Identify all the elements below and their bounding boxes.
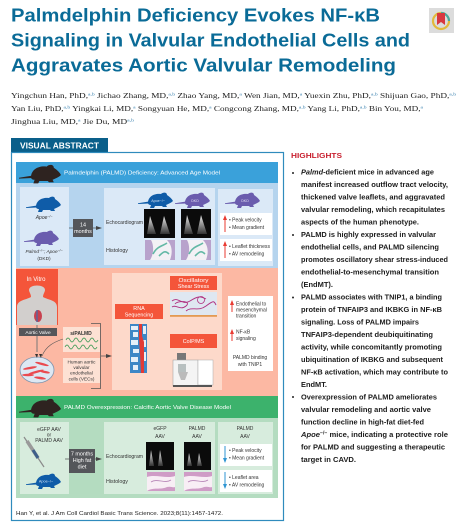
outcomes white box: transition (236, 314, 257, 320)
panel: advanced age model (16, 162, 278, 268)
mouse groups box: −/− (58, 248, 63, 252)
authors: Jie Du, MD (81, 117, 128, 126)
outcomes white box: mesenchymal (236, 308, 267, 314)
highlights list (292, 168, 448, 464)
aortic valve label: Aortic Valve (25, 330, 51, 336)
highlight 3 (292, 293, 448, 389)
siPALMD box (63, 327, 100, 352)
authors: Congcong Zhang, MD, (212, 104, 299, 113)
authors: a (421, 104, 423, 110)
mouse groups box: Apoe (36, 215, 47, 221)
visual abstract frame (12, 152, 284, 520)
oscillatory shear stress (170, 276, 217, 290)
panel header: overexpression: PALMD Overexpression: Calcific Aortic Valve Disease Model (64, 405, 231, 411)
injection box: eGFP AAV (37, 427, 62, 433)
highlight 1: Palmd-deficient mice in advanced age (301, 168, 434, 177)
imaging results box (104, 188, 215, 265)
authors: a (78, 118, 81, 122)
imaging results box: Histology (106, 479, 129, 485)
highlight 2: endothelial-to-mesenchymal transition (301, 268, 439, 277)
highlight 3: NF-κB activation, which may contribute to (301, 368, 448, 376)
highlight 1: thickened valve leaflets, and aggravated (301, 193, 445, 202)
authors (11, 91, 457, 126)
panel header: deficiency (16, 162, 278, 183)
visual abstract tab: VISUAL ABSTRACT (20, 142, 99, 150)
PALMD AAV outcomes box: • Peak velocity (229, 448, 262, 454)
authors: a (239, 92, 242, 96)
injection box: or (47, 432, 52, 438)
injection box: PALMD AAV (35, 438, 63, 444)
authors: a,b (360, 104, 367, 110)
culture dish (20, 325, 63, 383)
in vitro human figure: In Vitro (27, 277, 46, 283)
imaging results box: Apoe−/− (151, 199, 165, 203)
outcomes white box (228, 296, 273, 371)
authors: a,b (168, 92, 176, 98)
highlight 4: −/− (320, 430, 327, 436)
authors: Yingchun Han, PhD, (11, 91, 74, 100)
mass spectrometer (173, 353, 213, 387)
outcomes white box: Endothelial to (236, 302, 267, 308)
DKD outcomes box: DKD (241, 199, 249, 203)
human VECs label: Human aortic (68, 360, 96, 364)
oscillatory shear stress: Oscillatory (178, 278, 209, 284)
arrow and 7 months: High fat (73, 458, 92, 464)
authors: a,b (88, 92, 96, 98)
mouse groups box: −/− (39, 248, 44, 252)
PALMD AAV outcomes box: AAV (240, 434, 250, 440)
oscillatory shear stress: Shear Stress (178, 284, 209, 290)
arrow and 7 months (65, 449, 102, 473)
authors: Yuexin Zhu, PhD, (302, 91, 371, 100)
imaging results box (104, 422, 215, 494)
arrow and 7 months: diet (78, 464, 87, 470)
DKD outcomes box: • AV remodeling (229, 252, 265, 258)
panel: overexpression model (16, 396, 278, 498)
CoIP/MS: CoIP/MS (183, 339, 205, 345)
human VECs label (63, 358, 100, 383)
authors: Yang Li, PhD, (305, 104, 360, 113)
authors: a,b (371, 92, 379, 98)
title: Aggravates Aortic Valvular Remodeling (11, 54, 396, 76)
highlight 4: Apoe (300, 430, 320, 439)
highlight 2: (EndMT). (301, 280, 333, 289)
highlight 4: target in CAVD. (301, 455, 356, 464)
outcomes white box: PALMD binding (233, 355, 267, 361)
highlight 2: PALMD is highly expressed in valvular (301, 230, 436, 239)
highlight 1: valvular remodeling, which recapitulates (301, 205, 445, 214)
highlight 4: valvular remodeling and aortic valve (301, 405, 431, 414)
title: Signaling in Valvular Endothelial Cells and (11, 30, 410, 50)
highlights heading: HIGHLIGHTS (291, 151, 342, 160)
imaging results box: PALMD (189, 426, 206, 432)
authors: Zhao Yang, MD, (175, 91, 239, 100)
imaging results box: Echocardiogram (106, 454, 143, 460)
authors: Songyuan He, MD, (136, 104, 209, 113)
authors: Wen Jian, MD, (242, 91, 300, 100)
PALMD AAV outcomes box (218, 422, 273, 494)
highlight 3: PALMD associates with TNIP1, a binding (301, 293, 442, 302)
outcomes white box: signaling (236, 336, 256, 342)
arrow and 14 months (69, 219, 102, 237)
bracket arrow (91, 324, 112, 388)
arrow and 14 months: 14 (80, 222, 86, 228)
authors: a (209, 104, 212, 110)
highlight 1 (292, 168, 448, 227)
authors: Yan Liu, PhD, (11, 104, 55, 113)
panel header: deficiency: Palmdelphin (PALMD) Deficiency: Advanced Age Model (64, 170, 220, 176)
authors: a,b (64, 104, 71, 110)
icon: crossmark badge (429, 8, 454, 33)
PALMD AAV outcomes box: • Leaflet area (229, 475, 259, 481)
arrow and 14 months: months (74, 229, 92, 235)
authors: a,b (299, 104, 306, 110)
human VECs label: endothelial (70, 370, 93, 376)
highlight 2 (292, 230, 448, 289)
imaging results box: DKD (191, 199, 199, 203)
in vitro human figure (16, 269, 58, 325)
DKD outcomes box: • Peak velocity (229, 218, 262, 224)
title: Palmdelphin Deficiency Evokes NF-κB (11, 4, 380, 26)
imaging results box: Echocardiogram (106, 220, 143, 226)
highlight 4: function decline in high-fat diet-fed (301, 418, 424, 426)
title (11, 4, 410, 76)
authors: Shijuan Gao, PhD, (378, 91, 449, 100)
siPALMD box: siPALMD (70, 331, 92, 337)
imaging results box: AAV (155, 434, 165, 440)
authors: a (300, 92, 302, 96)
PALMD AAV outcomes box: • AV remodeling (229, 482, 265, 488)
arrow and 7 months: 7 months (71, 452, 93, 458)
authors: a,b (127, 118, 135, 124)
flow diagram (170, 292, 217, 317)
human VECs label: cells (VECs) (69, 376, 95, 382)
aortic valve label (19, 328, 57, 336)
outcomes white box: with TNIP1 (238, 362, 262, 368)
DKD outcomes box: • Leaflet thickness (229, 244, 271, 250)
human VECs label: valvular (73, 365, 90, 370)
mouse groups box: Palmd (25, 250, 39, 255)
highlight 3: protein of TNFAIP3 and IKBKG in NF-κB (301, 305, 443, 314)
imaging results box: Histology (106, 248, 129, 254)
DKD outcomes box: • Mean gradient (229, 225, 265, 231)
authors: Jichao Zhang, MD, (95, 91, 169, 100)
highlight 4: mice, indicating a protective role (327, 430, 448, 439)
authors: Yingkai Li, MD, (70, 104, 133, 113)
highlight 3: activity, while concomitantly promoting (301, 342, 442, 352)
RNA sequencing (115, 304, 163, 319)
highlight 3: TNFAIP3-dependent deubiquitinating (301, 330, 433, 339)
outcomes white box: NF-κB (236, 330, 251, 336)
DKD outcomes box (218, 189, 273, 266)
authors: Bin You, MD, (367, 104, 421, 113)
visual abstract tab (11, 138, 108, 153)
highlight 3: signaling. Loss of PALMD impairs (301, 318, 419, 327)
mouse groups box: −/− (47, 214, 52, 218)
highlight 2: promotes oscillatory shear stress-induced (301, 255, 448, 264)
methods box (112, 273, 222, 390)
heatmap (130, 324, 147, 373)
highlight 3: EndMT. (301, 380, 327, 389)
panel header: overexpression (16, 396, 278, 418)
highlight 4 (292, 392, 448, 464)
imaging results box: eGFP (153, 426, 167, 432)
panel: in vitro (16, 268, 278, 396)
highlight 1: aspects of the human phenotype. (301, 218, 419, 227)
PALMD AAV outcomes box: • Mean gradient (229, 456, 265, 462)
authors: a,b (449, 92, 457, 98)
authors: a (133, 104, 136, 110)
citation: Han Y, et al. J Am Coll Cardiol Basic Trans Science. 2023;8(11):1457-1472. (16, 511, 223, 517)
mouse groups box (20, 187, 69, 266)
RNA sequencing: Sequencing (125, 312, 153, 318)
mouse groups box: (DKD) (37, 256, 51, 262)
highlight 1: manifest increased outflow tract velocity, (301, 180, 448, 189)
RNA sequencing: RNA (133, 306, 145, 312)
imaging results box: AAV (192, 434, 202, 440)
mouse groups box: ; Apoe (44, 249, 58, 255)
highlight 3: ubiquitination of IKBKG and subsequent (301, 355, 443, 364)
highlight 4: for PALMD and suggesting a therapeutic (301, 442, 445, 452)
PALMD AAV outcomes box: PALMD (237, 426, 254, 432)
highlight 2: endothelial cells, and PALMD silencing (301, 243, 439, 252)
injection box: Apoe−/− (39, 480, 54, 484)
injection box (20, 422, 69, 494)
authors: Jinghua Liu, MD, (11, 117, 65, 126)
highlight 4: Overexpression of PALMD ameliorates (301, 392, 437, 402)
